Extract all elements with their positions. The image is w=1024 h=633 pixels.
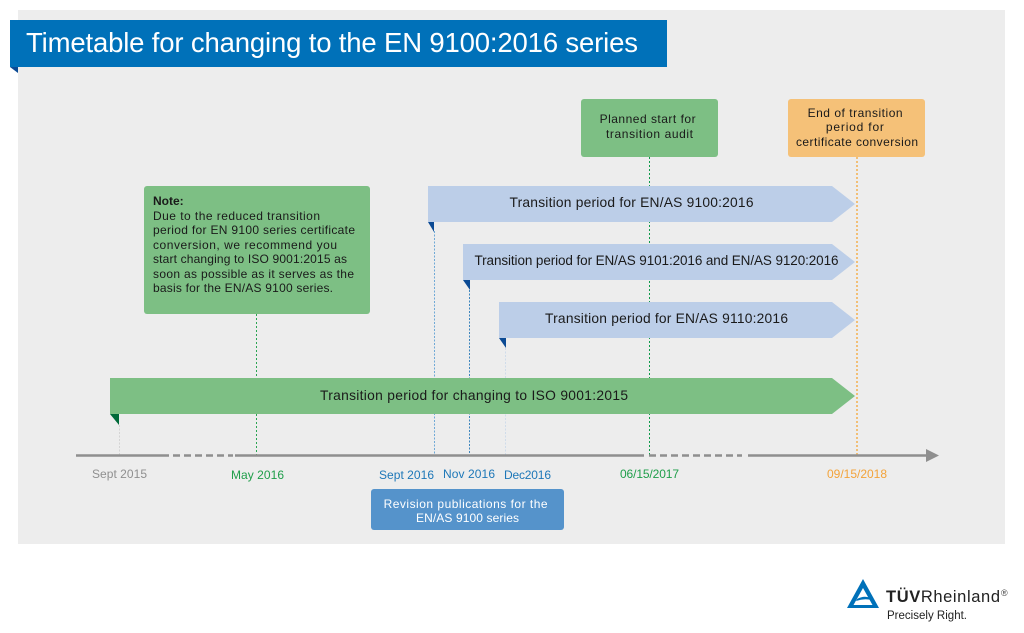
date label: 09/15/2018: 09/15/2018	[827, 467, 887, 481]
callout: planned start: Planned start for	[600, 112, 696, 126]
callout: end of transition: period for	[826, 120, 884, 134]
callout: end of transition	[788, 99, 925, 157]
title banner	[10, 20, 667, 73]
callout: note: period for EN 9100 series certificate	[153, 223, 355, 237]
arrow: EN/AS 9100:2016	[428, 186, 855, 232]
logo tagline: Precisely Right.	[887, 610, 967, 622]
logo: TÜV Rheinland	[847, 579, 1008, 622]
marker line: Nov 2016	[468, 290, 470, 455]
callout: note: Note:	[153, 194, 184, 208]
marker line: 09/15/2018	[856, 157, 858, 455]
date label: Dec2016: Dec2016	[504, 468, 551, 482]
date label: Sept 2016: Sept 2016	[379, 468, 434, 482]
logo wave	[856, 597, 872, 601]
marker line: 06/15/2017	[648, 157, 650, 455]
arrow: ISO 9001:2015	[110, 378, 855, 425]
callout: planned start	[581, 99, 718, 157]
callout: note	[144, 186, 370, 314]
date label: Sept 2015: Sept 2015	[92, 467, 147, 481]
callout: revision publications	[371, 489, 564, 530]
date label: Nov 2016: Nov 2016	[443, 467, 495, 481]
timeline axis	[76, 449, 939, 462]
marker line: Sept 2016	[434, 231, 436, 455]
arrow: EN/AS 9101 and 9120: Transition period for EN/AS 9101:2016 and EN/AS 9120:2016	[474, 253, 838, 268]
callout: revision publications: EN/AS 9100 series	[416, 511, 519, 525]
arrow: EN/AS 9101 and 9120	[463, 244, 855, 290]
arrow: EN/AS 9110:2016	[499, 302, 855, 348]
arrow: EN/AS 9100:2016: Transition period for EN/AS 9100:2016	[510, 195, 754, 210]
callout: note: conversion, we recommend you	[153, 238, 337, 252]
callout: end of transition: End of transition	[808, 106, 903, 120]
callout: end of transition: certificate conversion	[796, 135, 918, 149]
date label: 06/15/2017: 06/15/2017	[620, 467, 679, 481]
title: Timetable for changing to the EN 9100:2016 series	[26, 27, 638, 58]
callout: note: start changing to ISO 9001:2015 as	[153, 252, 347, 266]
callout: note: soon as possible as it serves as the	[153, 267, 354, 281]
arrow: EN/AS 9110:2016: Transition period for EN/AS 9110:2016	[545, 311, 788, 326]
date label: May 2016: May 2016	[231, 468, 284, 482]
icon: triangle	[847, 579, 879, 608]
callout: revision publications: Revision publications for the	[384, 497, 548, 511]
arrow: ISO 9001:2015: Transition period for changing to ISO 9001:2015	[320, 388, 628, 403]
marker line: May 2016	[256, 314, 258, 455]
callout: note: Due to the reduced transition	[153, 209, 320, 223]
registered mark: ®	[1001, 588, 1008, 598]
marker line: Dec 2016	[504, 348, 506, 455]
callout: planned start: transition audit	[606, 127, 694, 141]
logo wordmark: TÜVRheinland	[886, 587, 1000, 606]
marker line: Sept 2015	[118, 425, 120, 455]
callout: note: basis for the EN/AS 9100 series.	[153, 281, 333, 295]
